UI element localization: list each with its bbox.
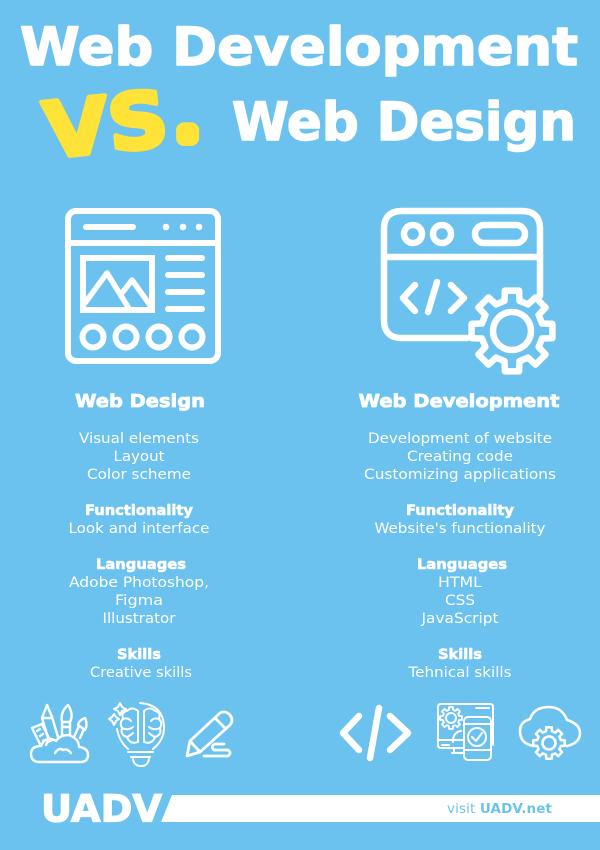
icon: brain lightbulb	[109, 703, 164, 766]
icon: art tools in a cloud	[31, 705, 88, 762]
text: Tehnical skills: Tehnical skills	[407, 665, 512, 681]
text: Adobe Photoshop,: Adobe Photoshop,	[69, 575, 209, 591]
text: Customizing applications: Customizing applications	[364, 467, 556, 483]
text: CSS: CSS	[445, 593, 475, 609]
text: HTML: HTML	[438, 575, 482, 591]
title: Web Design: Web Design	[232, 92, 576, 153]
column: web development	[358, 391, 560, 681]
subheading: Languages: Languages	[96, 557, 186, 573]
heading: Web Development: Web Development	[358, 391, 560, 412]
text: Visual elements: Visual elements	[79, 431, 199, 447]
heading: Web Design: Web Design	[75, 391, 205, 412]
text: Illustrator: Illustrator	[102, 611, 176, 627]
subheading: Functionality: Functionality	[85, 503, 194, 519]
subheading: Skills: Skills	[117, 647, 161, 663]
text: Creative skills: Creative skills	[90, 665, 192, 681]
icon: pencil with scribble	[187, 712, 232, 756]
footer logo: UADV: UADV	[41, 788, 162, 830]
title: VS.: VS	[40, 75, 172, 177]
column: web design	[68, 391, 210, 681]
text: Layout: Layout	[114, 449, 165, 465]
title: VS.: .	[180, 102, 195, 148]
footer link: visit UADV.net: visit UADV.net	[447, 801, 553, 817]
footer bar	[161, 795, 600, 822]
text: Creating code: Creating code	[407, 449, 513, 465]
title: Web Development: Web Development	[20, 17, 578, 78]
icon: web design browser layout	[68, 211, 218, 361]
text: Look and interface: Look and interface	[68, 521, 210, 537]
subheading: Skills: Skills	[438, 647, 482, 663]
icon: monitor and phone	[438, 704, 493, 760]
text: Website's functionality: Website's functionality	[374, 521, 546, 537]
text: JavaScript: JavaScript	[420, 611, 499, 627]
text: Figma: Figma	[115, 593, 163, 609]
icon: cloud with gear	[520, 707, 580, 759]
text: Color scheme: Color scheme	[87, 467, 191, 483]
text: Development of website: Development of website	[368, 431, 552, 447]
icon: web development browser with code and gear	[384, 211, 552, 371]
icon: code brackets	[343, 708, 408, 758]
subheading: Functionality: Functionality	[406, 503, 515, 519]
subheading: Languages: Languages	[417, 557, 507, 573]
